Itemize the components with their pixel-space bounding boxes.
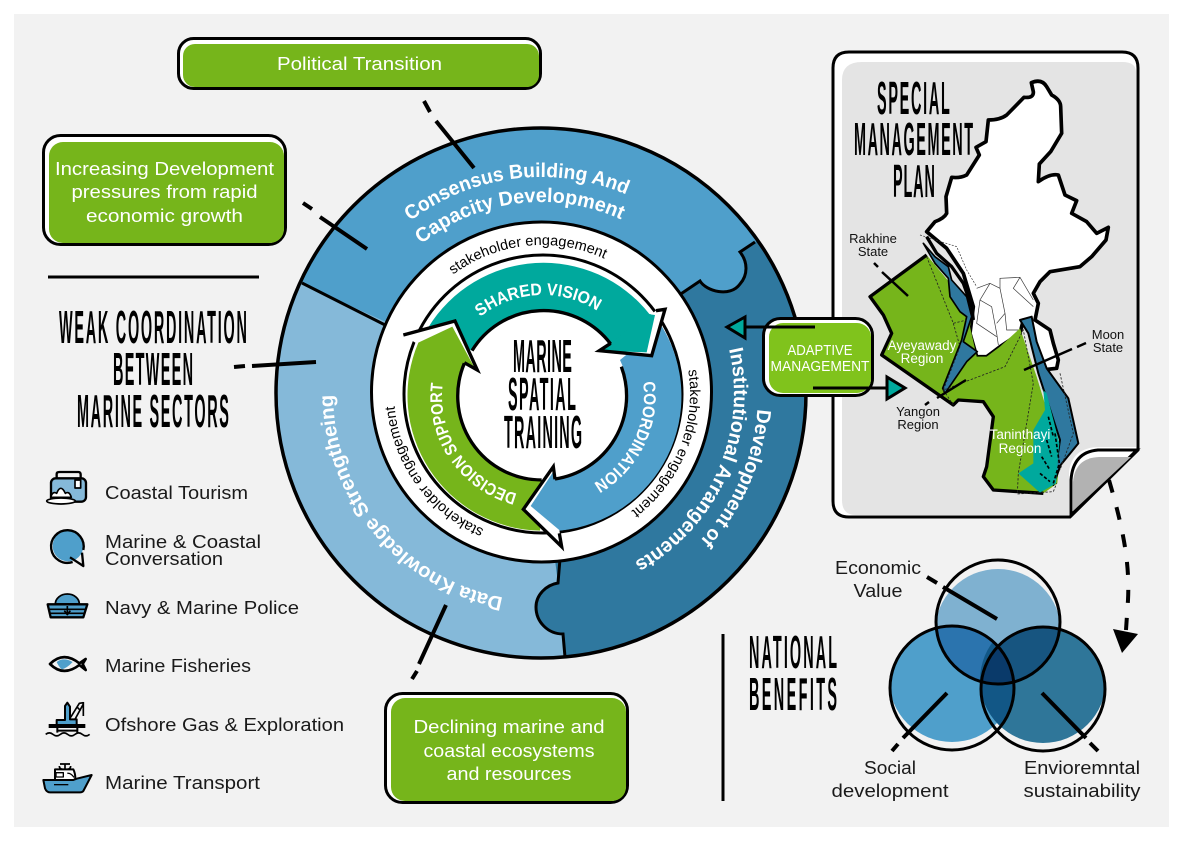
- callout: political transition: Political Transition: [277, 54, 442, 74]
- stakeholder label lower left: stakeholder engagement: [385, 406, 483, 536]
- callout: adaptive management: [764, 318, 872, 396]
- arrow label: coordination: COORDINATION: [594, 382, 656, 493]
- centre disc outline: [458, 311, 627, 480]
- label: fisheries: Marine Fisheries: [105, 656, 251, 676]
- label: economic value: Value: [854, 581, 902, 601]
- label: social development: Social: [864, 758, 916, 778]
- heading: national benefits: [749, 627, 837, 721]
- label: marine conservation: [105, 532, 261, 569]
- leader: weak coordination: [234, 362, 316, 367]
- ring text: data knowledge: Data Knowledge Strengtheing: [320, 396, 502, 611]
- venn: outlines: [890, 560, 1105, 751]
- map label: Yangon: [896, 404, 940, 432]
- centre title: [504, 331, 582, 459]
- heading: special management plan: PLAN: [893, 156, 935, 208]
- heading: national benefits: BENEFITS: [749, 669, 837, 721]
- arrow: shared vision: [428, 263, 655, 352]
- ring text: institutional arrangements: Institutional Arrangements: [636, 348, 748, 570]
- sector list: [43, 472, 344, 793]
- stakeholder label right: stakeholder engagement: [631, 370, 700, 518]
- icon: navy: [48, 594, 87, 617]
- heading: weak coordination: WEAK COORDINATION: [59, 302, 247, 354]
- callout: political transition: [178, 38, 540, 88]
- map label: Taninthayi: [990, 427, 1050, 456]
- callout: development pressures: [44, 136, 286, 244]
- callout: development pressures: economic growth: [86, 206, 243, 226]
- map label: Rakhine: Rakhine: [849, 231, 897, 246]
- label: marine conservation: Marine & Coastal: [105, 532, 261, 552]
- leader: declining ecosystems: [412, 605, 446, 679]
- panel: special management plan page: [833, 52, 1138, 517]
- label: social development: [832, 758, 948, 801]
- map: dashed zones: [927, 257, 1073, 494]
- map label: Moon: State: [1093, 340, 1123, 355]
- callout: development pressures: pressures from rapid: [72, 182, 258, 202]
- icon: ship: [43, 763, 92, 792]
- venn: overlaps: [938, 628, 1058, 726]
- map: northern land: [927, 81, 1108, 370]
- label: navy: Navy & Marine Police: [105, 598, 299, 618]
- rule beside national benefits: [722, 634, 724, 801]
- icon: marine conservation: [51, 530, 84, 566]
- map label: Ayeyawady: [888, 338, 957, 366]
- callout: adaptive management: ADAPTIVE: [788, 342, 852, 359]
- map label: Ayeyawady: Ayeyawady: [888, 338, 957, 353]
- centre title: SPATIAL: [508, 369, 576, 421]
- callout: declining ecosystems: Declining marine and: [414, 717, 604, 737]
- label: social development: development: [832, 781, 948, 801]
- icon: coastal tourism: [47, 472, 86, 504]
- heading: national benefits: NATIONAL: [749, 627, 837, 679]
- map label: Taninthayi: Region: [999, 441, 1041, 456]
- label: economic value: [835, 558, 921, 601]
- ring text: capacity development: Capacity Development: [416, 188, 625, 242]
- label: transport: Marine Transport: [105, 773, 260, 793]
- leader: development pressures: [303, 203, 367, 249]
- map: teal archipelago: [1018, 383, 1059, 493]
- outer ring outline: [276, 128, 806, 658]
- venn: right circle fill: [984, 631, 1104, 743]
- stakeholder label top: stakeholder engagement: [450, 237, 608, 274]
- map: eastern coast water: [1020, 317, 1078, 485]
- callout: adaptive management: MANAGEMENT: [770, 358, 870, 375]
- label: environmental sustainability: Envioremntal: [1024, 758, 1140, 778]
- map label: Ayeyawady: Region: [901, 351, 943, 366]
- heading: special management plan: [854, 73, 973, 208]
- callout: development pressures: Increasing Development: [55, 159, 274, 179]
- map label: Yangon: Region: [897, 417, 939, 432]
- arrow: decision support: [403, 321, 543, 531]
- label: marine conservation: Conversation: [105, 549, 223, 569]
- rule above weak coordination: [48, 276, 259, 278]
- map leaders: [874, 263, 1086, 405]
- arrow label: decision support: DECISION SUPPORT: [430, 382, 516, 505]
- map of Myanmar: [870, 81, 1108, 494]
- map label: Rakhine: [849, 231, 897, 259]
- outer ring segment: consensus building: [302, 130, 756, 322]
- leader: political transition: [424, 101, 474, 168]
- page sheet: [833, 52, 1138, 517]
- map label: Moon: [1092, 327, 1124, 355]
- heading: special management plan: MANAGEMENT: [854, 114, 973, 166]
- map label: Taninthayi: Taninthayi: [990, 427, 1050, 442]
- centre title: TRAINING: [504, 407, 582, 459]
- arrow: dashed plan to benefits: [1109, 480, 1138, 653]
- venn: left circle fill: [892, 630, 997, 742]
- heading: weak coordination: BETWEEN: [113, 344, 193, 396]
- arrow label: shared vision: SHARED VISION: [475, 283, 602, 316]
- map: western coast black shoreline: [927, 237, 973, 320]
- stakeholder ring: [372, 222, 712, 562]
- map: internal boundaries: [977, 277, 1033, 345]
- heading: weak coordination: MARINE SECTORS: [77, 386, 229, 438]
- label: offshore: Ofshore Gas & Exploration: [105, 715, 344, 735]
- inner ring: [404, 255, 682, 533]
- map label: Rakhine: State: [858, 244, 888, 259]
- venn: top circle fill: [938, 569, 1058, 644]
- ring text: consensus building: Consensus Building And: [405, 162, 630, 218]
- label: coastal tourism: Coastal Tourism: [105, 483, 248, 503]
- centre title: MARINE: [513, 331, 572, 383]
- page fold: [1071, 450, 1137, 515]
- page inner shade: [842, 62, 1136, 515]
- arrow: adaptive to map: [813, 377, 905, 399]
- arrow: adaptive to ring: [727, 317, 815, 338]
- venn diagram: [889, 560, 1106, 752]
- outer ring segment: institutional arrangements: [538, 241, 804, 655]
- map: northern dashed coast line: [920, 235, 977, 287]
- map label: Moon: Moon: [1092, 327, 1124, 342]
- label: economic value: Economic: [835, 558, 921, 578]
- callout: declining ecosystems: [386, 694, 628, 802]
- ring text: development of: Development of: [702, 410, 772, 550]
- arrow: coordination: [523, 326, 681, 547]
- centre disc: [459, 312, 627, 480]
- heading: weak coordination: [59, 302, 247, 438]
- label: environmental sustainability: [1024, 758, 1140, 801]
- callout: declining ecosystems: and resources: [446, 764, 572, 784]
- circular diagram: [274, 126, 808, 660]
- label: environmental sustainability: sustainability: [1024, 781, 1140, 801]
- cycle arrows: [403, 263, 681, 547]
- segment divider lines: [302, 242, 755, 657]
- venn: leaders: [892, 577, 1098, 751]
- arrow head: shared vision: [599, 309, 665, 356]
- map label: Yangon: Yangon: [896, 404, 940, 419]
- icon: fish: [50, 657, 86, 671]
- callout: declining ecosystems: coastal ecosystems: [424, 741, 594, 761]
- outer ring segment: data knowledge: [276, 128, 806, 658]
- icon: offshore rig: [46, 702, 90, 736]
- map: western coast water: [923, 243, 977, 393]
- heading: special management plan: SPECIAL: [877, 73, 950, 125]
- map: western green region: [870, 255, 1060, 493]
